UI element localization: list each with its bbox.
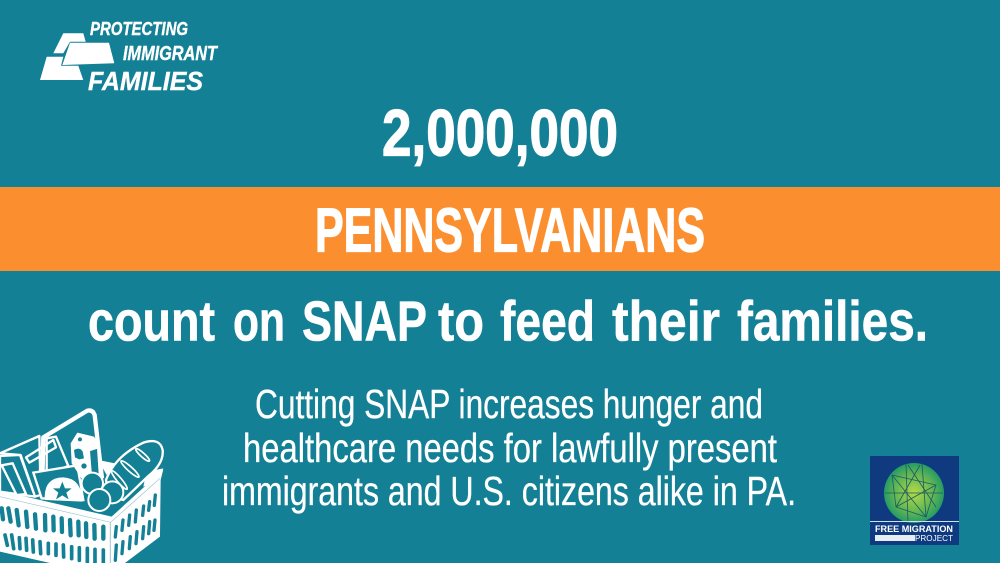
- statement: families.: [737, 290, 928, 354]
- statement: feed: [500, 290, 595, 354]
- logo: Free Migration Project: [870, 456, 959, 545]
- back rim: [98, 460, 163, 487]
- logo text: [875, 524, 953, 543]
- boxes: [0, 436, 68, 497]
- logo text: [88, 18, 218, 96]
- statement: SNAP: [302, 290, 427, 354]
- logo: Protecting Immigrant Families: [40, 18, 218, 96]
- bread loaf: [106, 441, 163, 500]
- statement: count: [88, 290, 215, 354]
- statement: to: [438, 290, 484, 354]
- basket handle: [42, 410, 102, 498]
- statement: their: [612, 290, 720, 354]
- headline number: 2,000,000: [382, 96, 618, 170]
- logo text: FAMILIES: [88, 66, 204, 96]
- statement: [88, 290, 928, 354]
- body text: immigrants and U.S. citizens alike in PA.: [222, 468, 796, 514]
- icon: globe: [884, 463, 944, 523]
- banner text: PENNSYLVANIANS: [315, 196, 705, 266]
- logo text: PROTECTING: [90, 18, 188, 39]
- body text: [222, 381, 796, 514]
- basket slots: [2, 495, 155, 563]
- fruit: [82, 473, 123, 511]
- basket body: [0, 469, 163, 563]
- icon: stacked bars: [40, 33, 114, 80]
- icon: grocery basket: [0, 410, 163, 563]
- body text: Cutting SNAP increases hunger and: [255, 381, 763, 427]
- logo text: IMMIGRANT: [123, 43, 218, 65]
- white bag with star: [33, 465, 83, 500]
- milk carton: [71, 433, 101, 480]
- logo text: PROJECT: [915, 534, 953, 543]
- orange banner: [0, 187, 1000, 271]
- body text: healthcare needs for lawfully present: [243, 425, 777, 471]
- logo text: FREE MIGRATION: [875, 524, 953, 534]
- statement: on: [233, 290, 285, 354]
